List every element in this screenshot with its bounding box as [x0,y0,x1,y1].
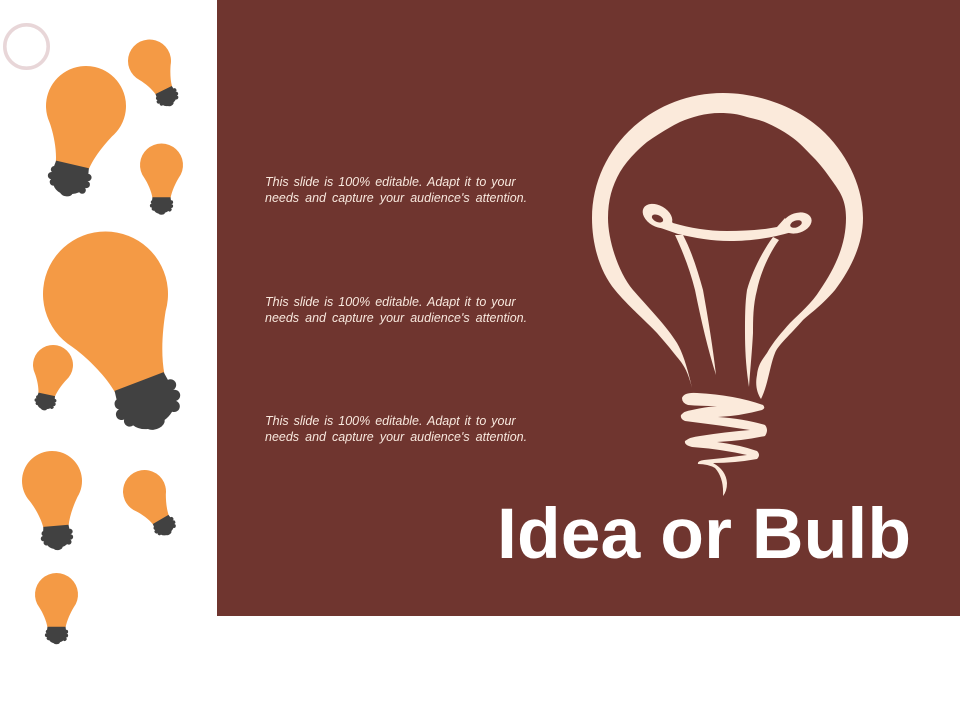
filament crossbar with loops [638,199,814,241]
icon: orange bulb 4 (largest) [25,213,216,451]
right filament wire [745,237,779,387]
text block 2 [265,295,527,325]
text block 1: This slide is 100% editable. Adapt it to your [265,175,516,189]
text block 3 [265,414,527,444]
text block 3: This slide is 100% editable. Adapt it to your [265,414,516,428]
icon: orange bulb 2 [121,32,191,115]
icon column: orange bulbs [19,32,216,644]
icon: orange bulb 7 [115,462,188,545]
text block 1: needs and capture your audience's attention. [265,191,527,205]
left filament wire [675,235,716,375]
screw coil [681,393,767,496]
panel: brown background [217,0,960,616]
glass outline [592,93,863,399]
icon: large bulb outline [592,93,863,496]
text block 1 [265,175,527,205]
title: Idea or Bulb [497,494,911,574]
icon: orange bulb 8 [35,573,78,644]
icon: orange bulb 3 [140,144,183,215]
text block 2: This slide is 100% editable. Adapt it to your [265,295,516,309]
icon: orange bulb 1 [26,58,134,205]
icon: orange bulb 5 [24,341,77,414]
text block 3: needs and capture your audience's attention. [265,430,527,444]
text block 2: needs and capture your audience's attention. [265,311,527,325]
icon: orange bulb 6 [19,448,88,553]
decorative ring [5,25,48,68]
